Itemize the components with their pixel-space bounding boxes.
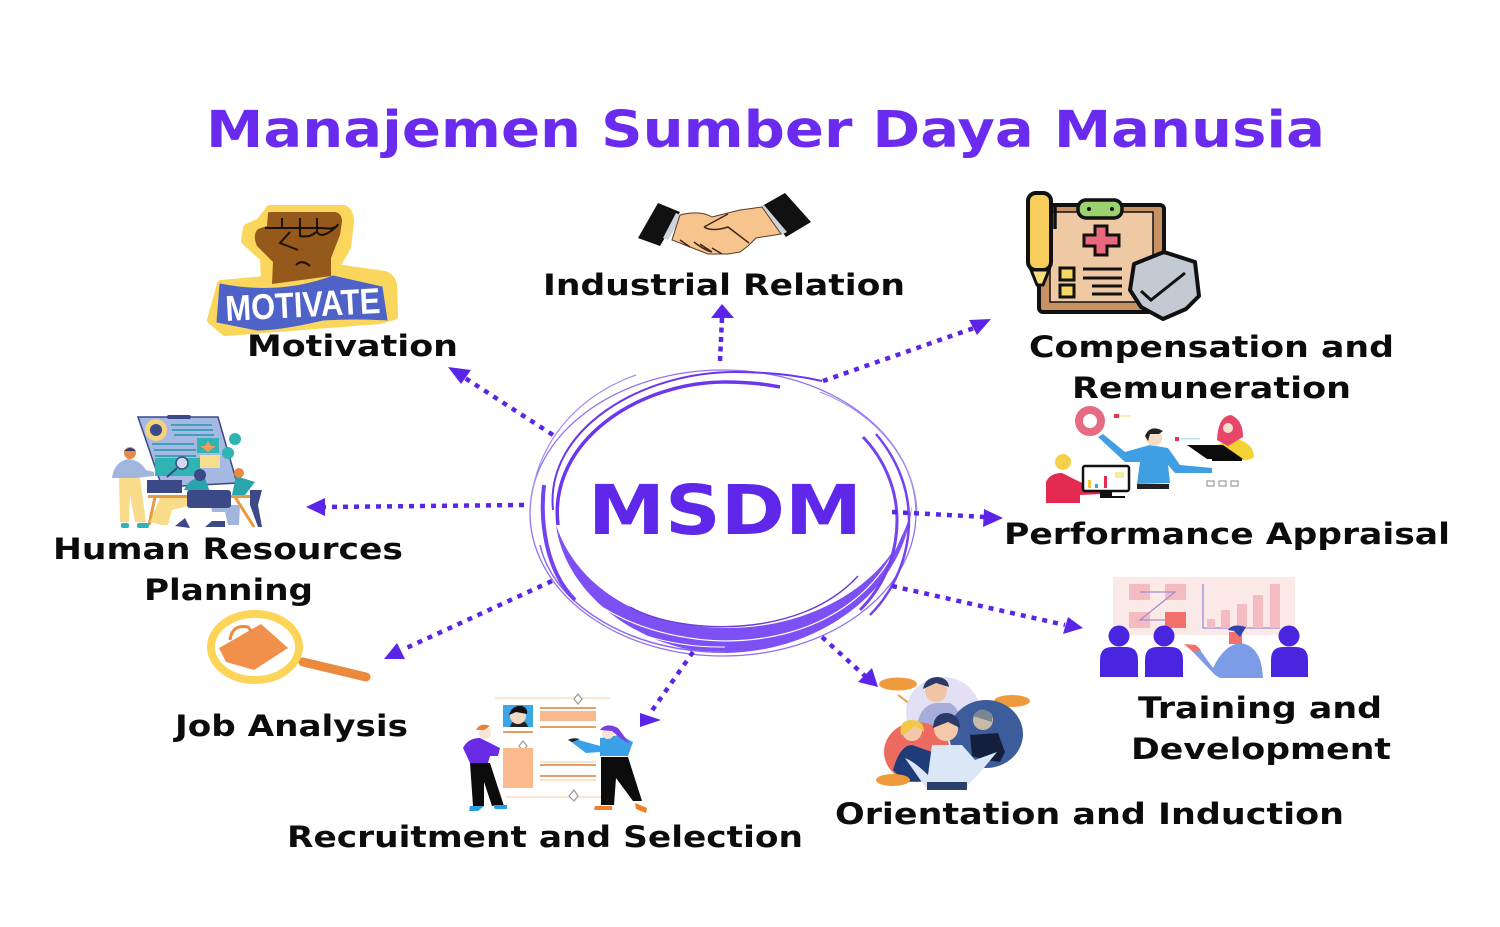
label: Compensation and Remuneration: Remuneration bbox=[1072, 371, 1351, 405]
icon: motivate fist bbox=[211, 209, 394, 332]
arrow: to Industrial Relation bbox=[711, 304, 734, 361]
label: Training and Development bbox=[1131, 691, 1391, 766]
title: Manajemen Sumber Daya Manusia bbox=[206, 101, 1325, 160]
label: Motivation: Motivation bbox=[247, 329, 458, 363]
label: Compensation and Remuneration: Compensation and bbox=[1029, 330, 1394, 364]
icon: human resources planning team bbox=[112, 415, 262, 528]
icon: recruitment candidates profile bbox=[463, 694, 647, 813]
icon: clipboard with shield bbox=[1028, 193, 1199, 319]
icon: handshake bbox=[638, 193, 811, 254]
icon: performance meeting people bbox=[1046, 410, 1254, 503]
arrow: to Job Analysis bbox=[384, 581, 552, 659]
arrow: to Training and Development bbox=[892, 586, 1083, 634]
arrow: to Performance Appraisal bbox=[892, 509, 1003, 527]
icon: magnifier with briefcase bbox=[211, 614, 366, 680]
label: Recruitment and Selection: Recruitment and Selection bbox=[287, 820, 803, 854]
icon: training presentation bbox=[1100, 577, 1308, 678]
label: Human Resources Planning: Planning bbox=[144, 573, 313, 607]
label: Performance Appraisal: Performance Appraisal bbox=[1004, 517, 1450, 551]
arrow: to Motivation bbox=[448, 367, 553, 435]
label: Industrial Relation: Industrial Relation bbox=[543, 268, 905, 302]
arrow: to Human Resources Planning bbox=[306, 498, 524, 516]
badge word: MOTIVATE bbox=[224, 280, 381, 329]
arrow: to Recruitment and Selection bbox=[640, 652, 693, 727]
label: Training and Development: Development bbox=[1131, 732, 1391, 766]
arrow: to Orientation and Induction bbox=[822, 637, 878, 687]
label: Human Resources Planning: Human Resources bbox=[53, 532, 403, 566]
arrow: to Compensation and Remuneration bbox=[823, 319, 991, 381]
central circle: MSDM bbox=[530, 370, 917, 656]
label: Job Analysis: Job Analysis bbox=[173, 709, 408, 743]
label: Human Resources Planning bbox=[53, 532, 403, 607]
label: Compensation and Remuneration bbox=[1029, 330, 1394, 405]
label: Training and Development: Training and bbox=[1138, 691, 1382, 725]
label: Orientation and Induction: Orientation and Induction bbox=[835, 797, 1344, 831]
icon: orientation group bbox=[876, 677, 1030, 790]
center label: MSDM bbox=[588, 471, 862, 551]
